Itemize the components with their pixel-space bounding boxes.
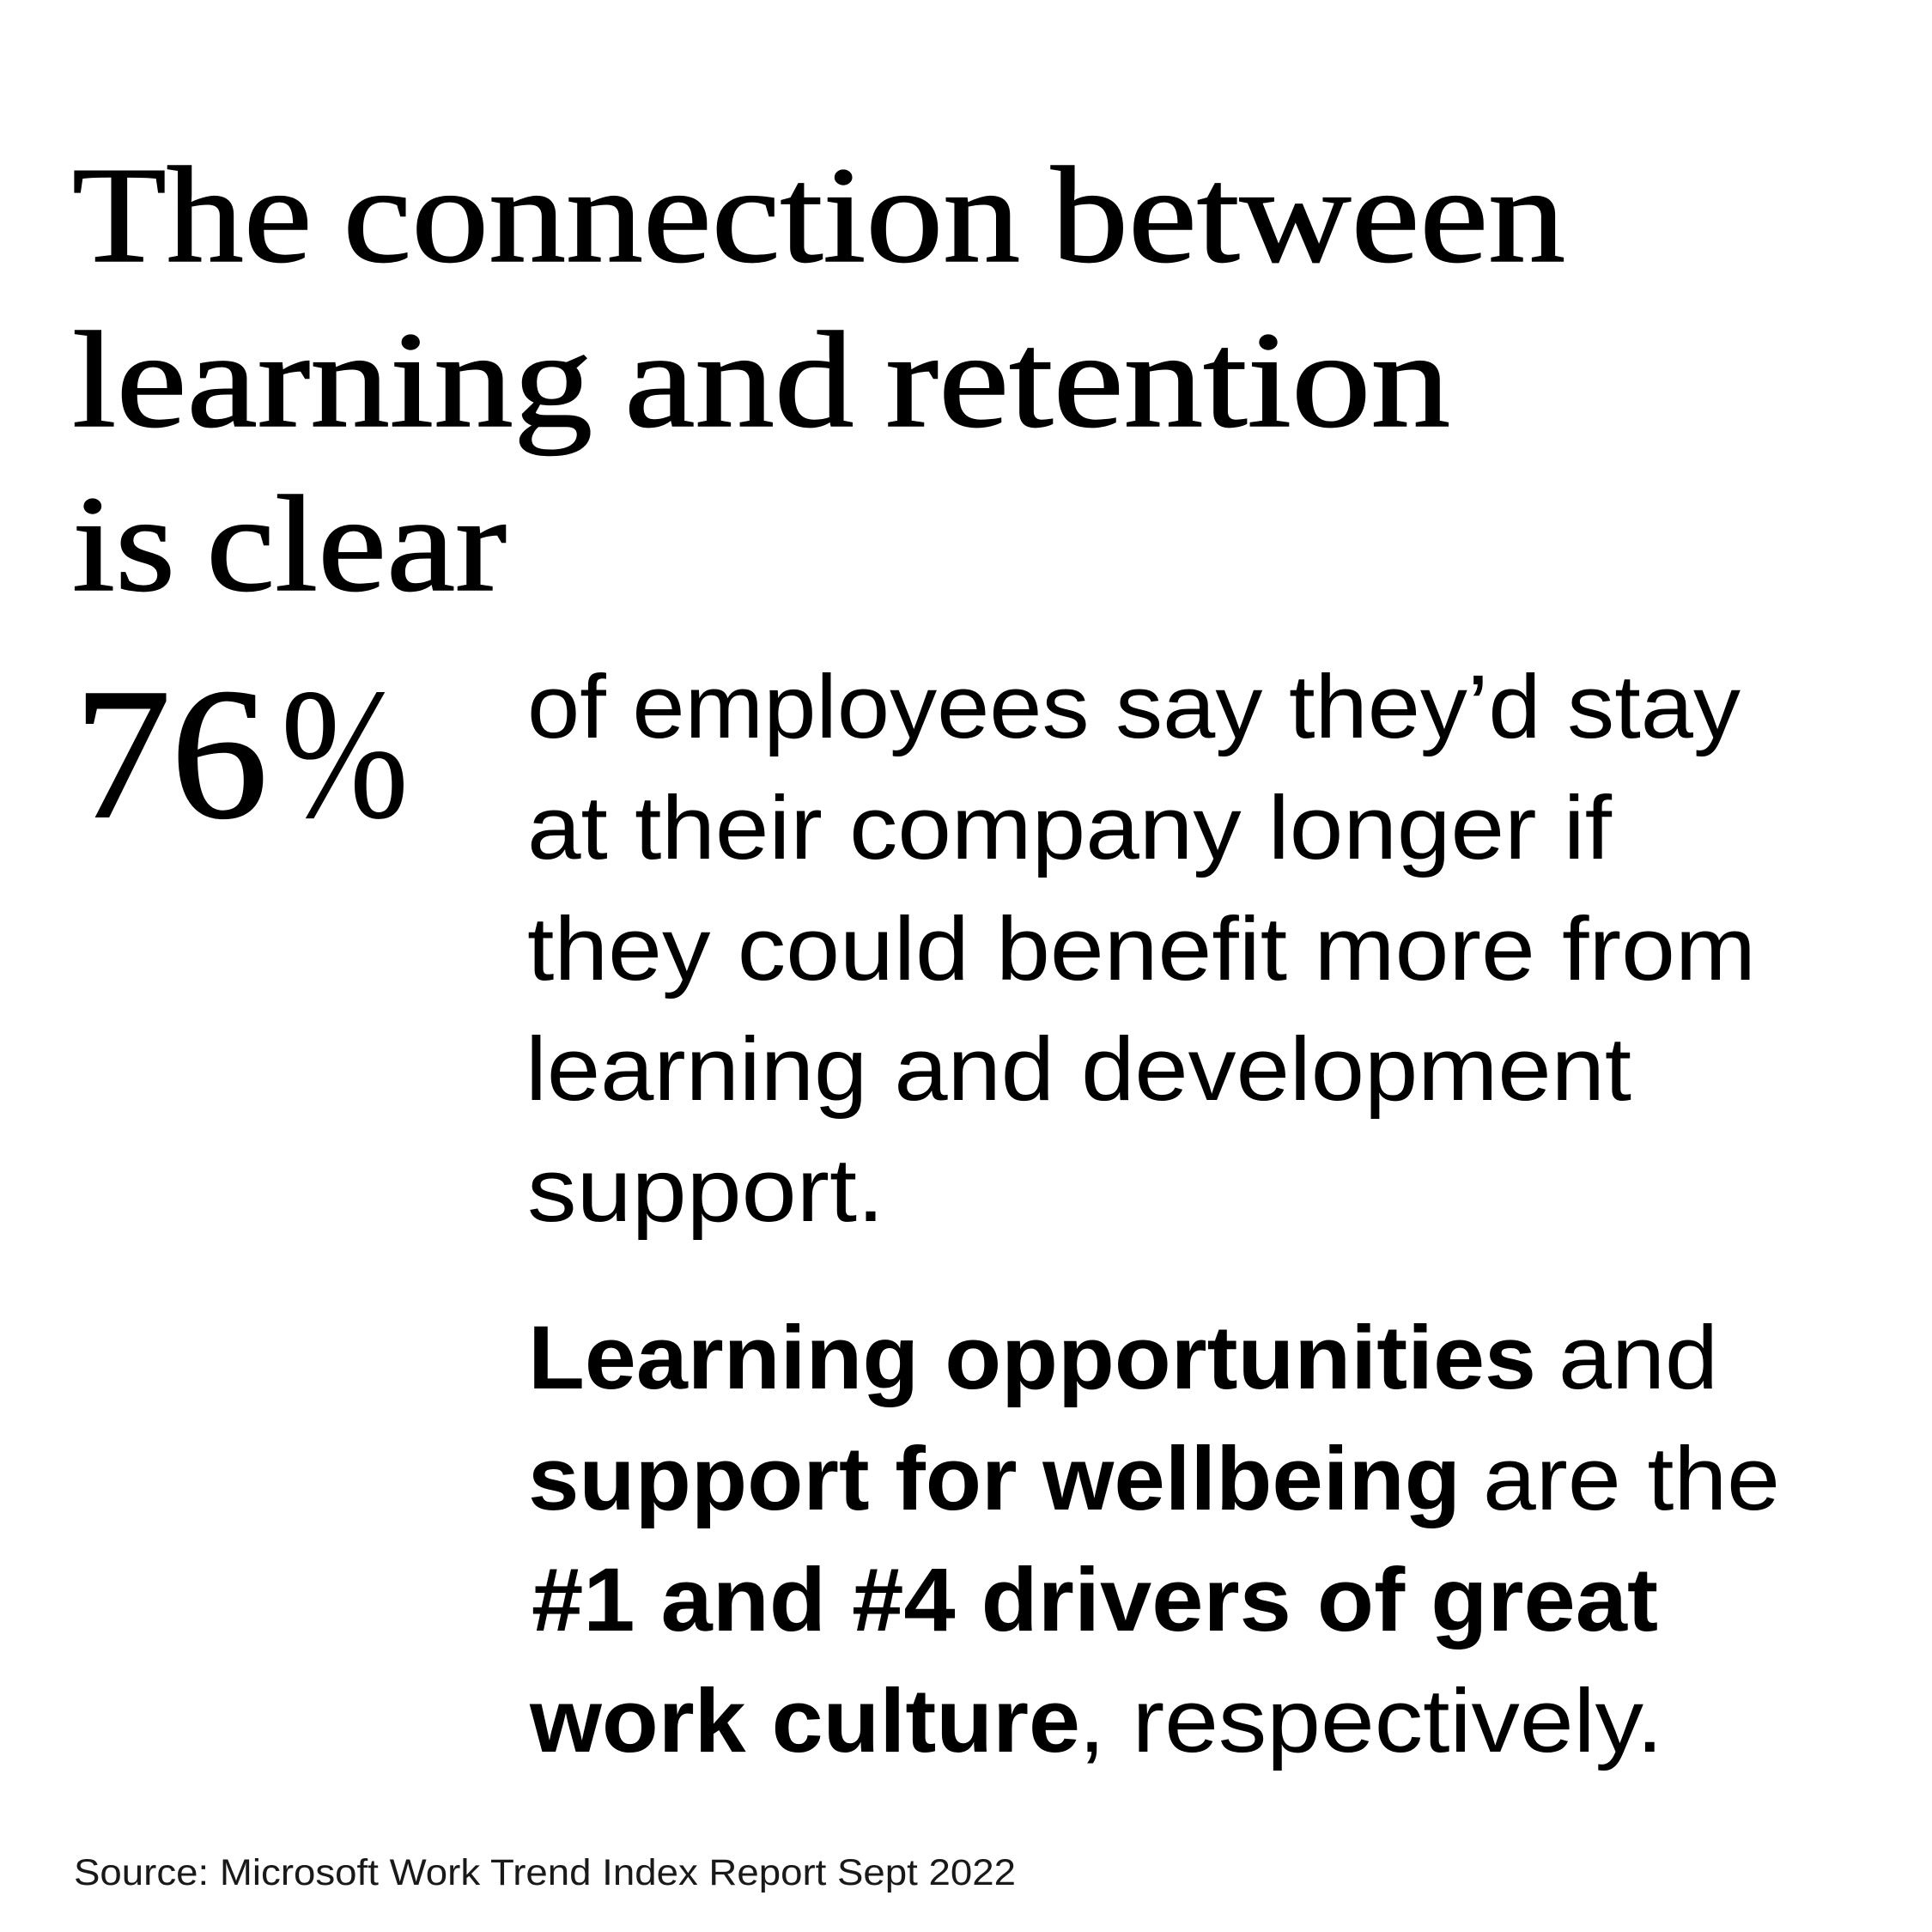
title: is clear bbox=[72, 467, 507, 620]
title: learning and retention bbox=[72, 303, 1450, 456]
text block: drivers of great work culture: work culture bbox=[529, 1671, 1080, 1771]
text block: drivers of great work culture bbox=[528, 1308, 1780, 1771]
title bbox=[72, 138, 1565, 620]
text block: employee retention statement: of employees say they’d stay bbox=[527, 657, 1741, 757]
text block: drivers of great work culture: and bbox=[1558, 1308, 1718, 1408]
text block: drivers of great work culture: are the bbox=[1483, 1429, 1780, 1529]
text block: employee retention statement: at their company longer if bbox=[527, 778, 1613, 878]
text block: drivers of great work culture: , respectively. bbox=[1078, 1671, 1663, 1771]
big statistic: 76% bbox=[74, 651, 409, 858]
source note: Source: Microsoft Work Trend Index Report Sept 2022 bbox=[74, 1852, 1016, 1893]
big statistic: 76%: % bbox=[281, 651, 409, 858]
big statistic: 76%: 76 bbox=[74, 651, 268, 858]
text block: drivers of great work culture: support for wellbeing bbox=[528, 1429, 1461, 1529]
text block: drivers of great work culture: Learning opportunities bbox=[528, 1308, 1536, 1408]
title: The connection between bbox=[72, 138, 1565, 291]
text block: employee retention statement bbox=[526, 657, 1756, 1241]
text block: employee retention statement: support. bbox=[527, 1140, 884, 1241]
text block: employee retention statement: they could benefit more from bbox=[527, 899, 1756, 999]
text block: drivers of great work culture: #1 and #4 drivers of great bbox=[532, 1550, 1658, 1650]
text block: employee retention statement: learning and development bbox=[526, 1019, 1631, 1120]
